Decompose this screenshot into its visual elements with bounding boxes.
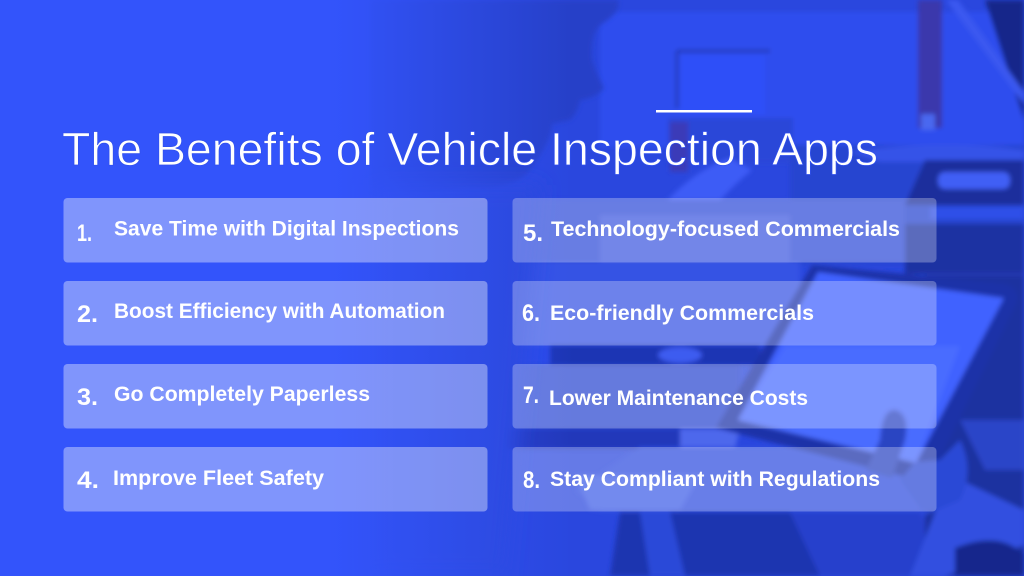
item 8: 8. [523,467,540,494]
title: The Benefits of Vehicle Inspection Apps [62,123,878,175]
accent line [656,110,752,112]
item 4 [64,447,488,512]
item 8: Stay Compliant with Regulations [550,468,880,491]
item 7: 7. [523,382,539,409]
car hood and window [790,145,1024,265]
thumb [866,410,906,478]
hands, arms and clothing behind boxes [505,262,800,346]
item 3: Go Completely Paperless [114,383,370,406]
item 2 [64,281,488,346]
item 1 [64,198,488,262]
item 3 [64,364,488,428]
item 1: 1. [77,220,92,247]
workshop wall [600,12,1024,147]
item 2: 2. [77,301,98,328]
item 1: Save Time with Digital Inspections [114,218,459,240]
item 5 [512,198,936,262]
item 3: 3. [77,384,98,411]
item 8 [512,447,936,512]
man's head silhouette [370,0,619,200]
tablet frame [716,265,1018,478]
item 4: 4. [77,467,99,494]
item 6: Eco-friendly Commercials [550,302,814,325]
item 4: Improve Fleet Safety [113,467,324,490]
item 6: 6. [522,300,540,327]
item 5: 5. [523,220,543,247]
bottom clothing [610,512,830,576]
tablet screen [738,272,1004,463]
item 7 [512,364,936,428]
item 7: Lower Maintenance Costs [549,387,808,410]
item 6 [512,281,936,346]
item 2: Boost Efficiency with Automation [114,300,445,323]
item 5: Technology-focused Commercials [551,218,900,241]
right dark side [925,275,1024,576]
